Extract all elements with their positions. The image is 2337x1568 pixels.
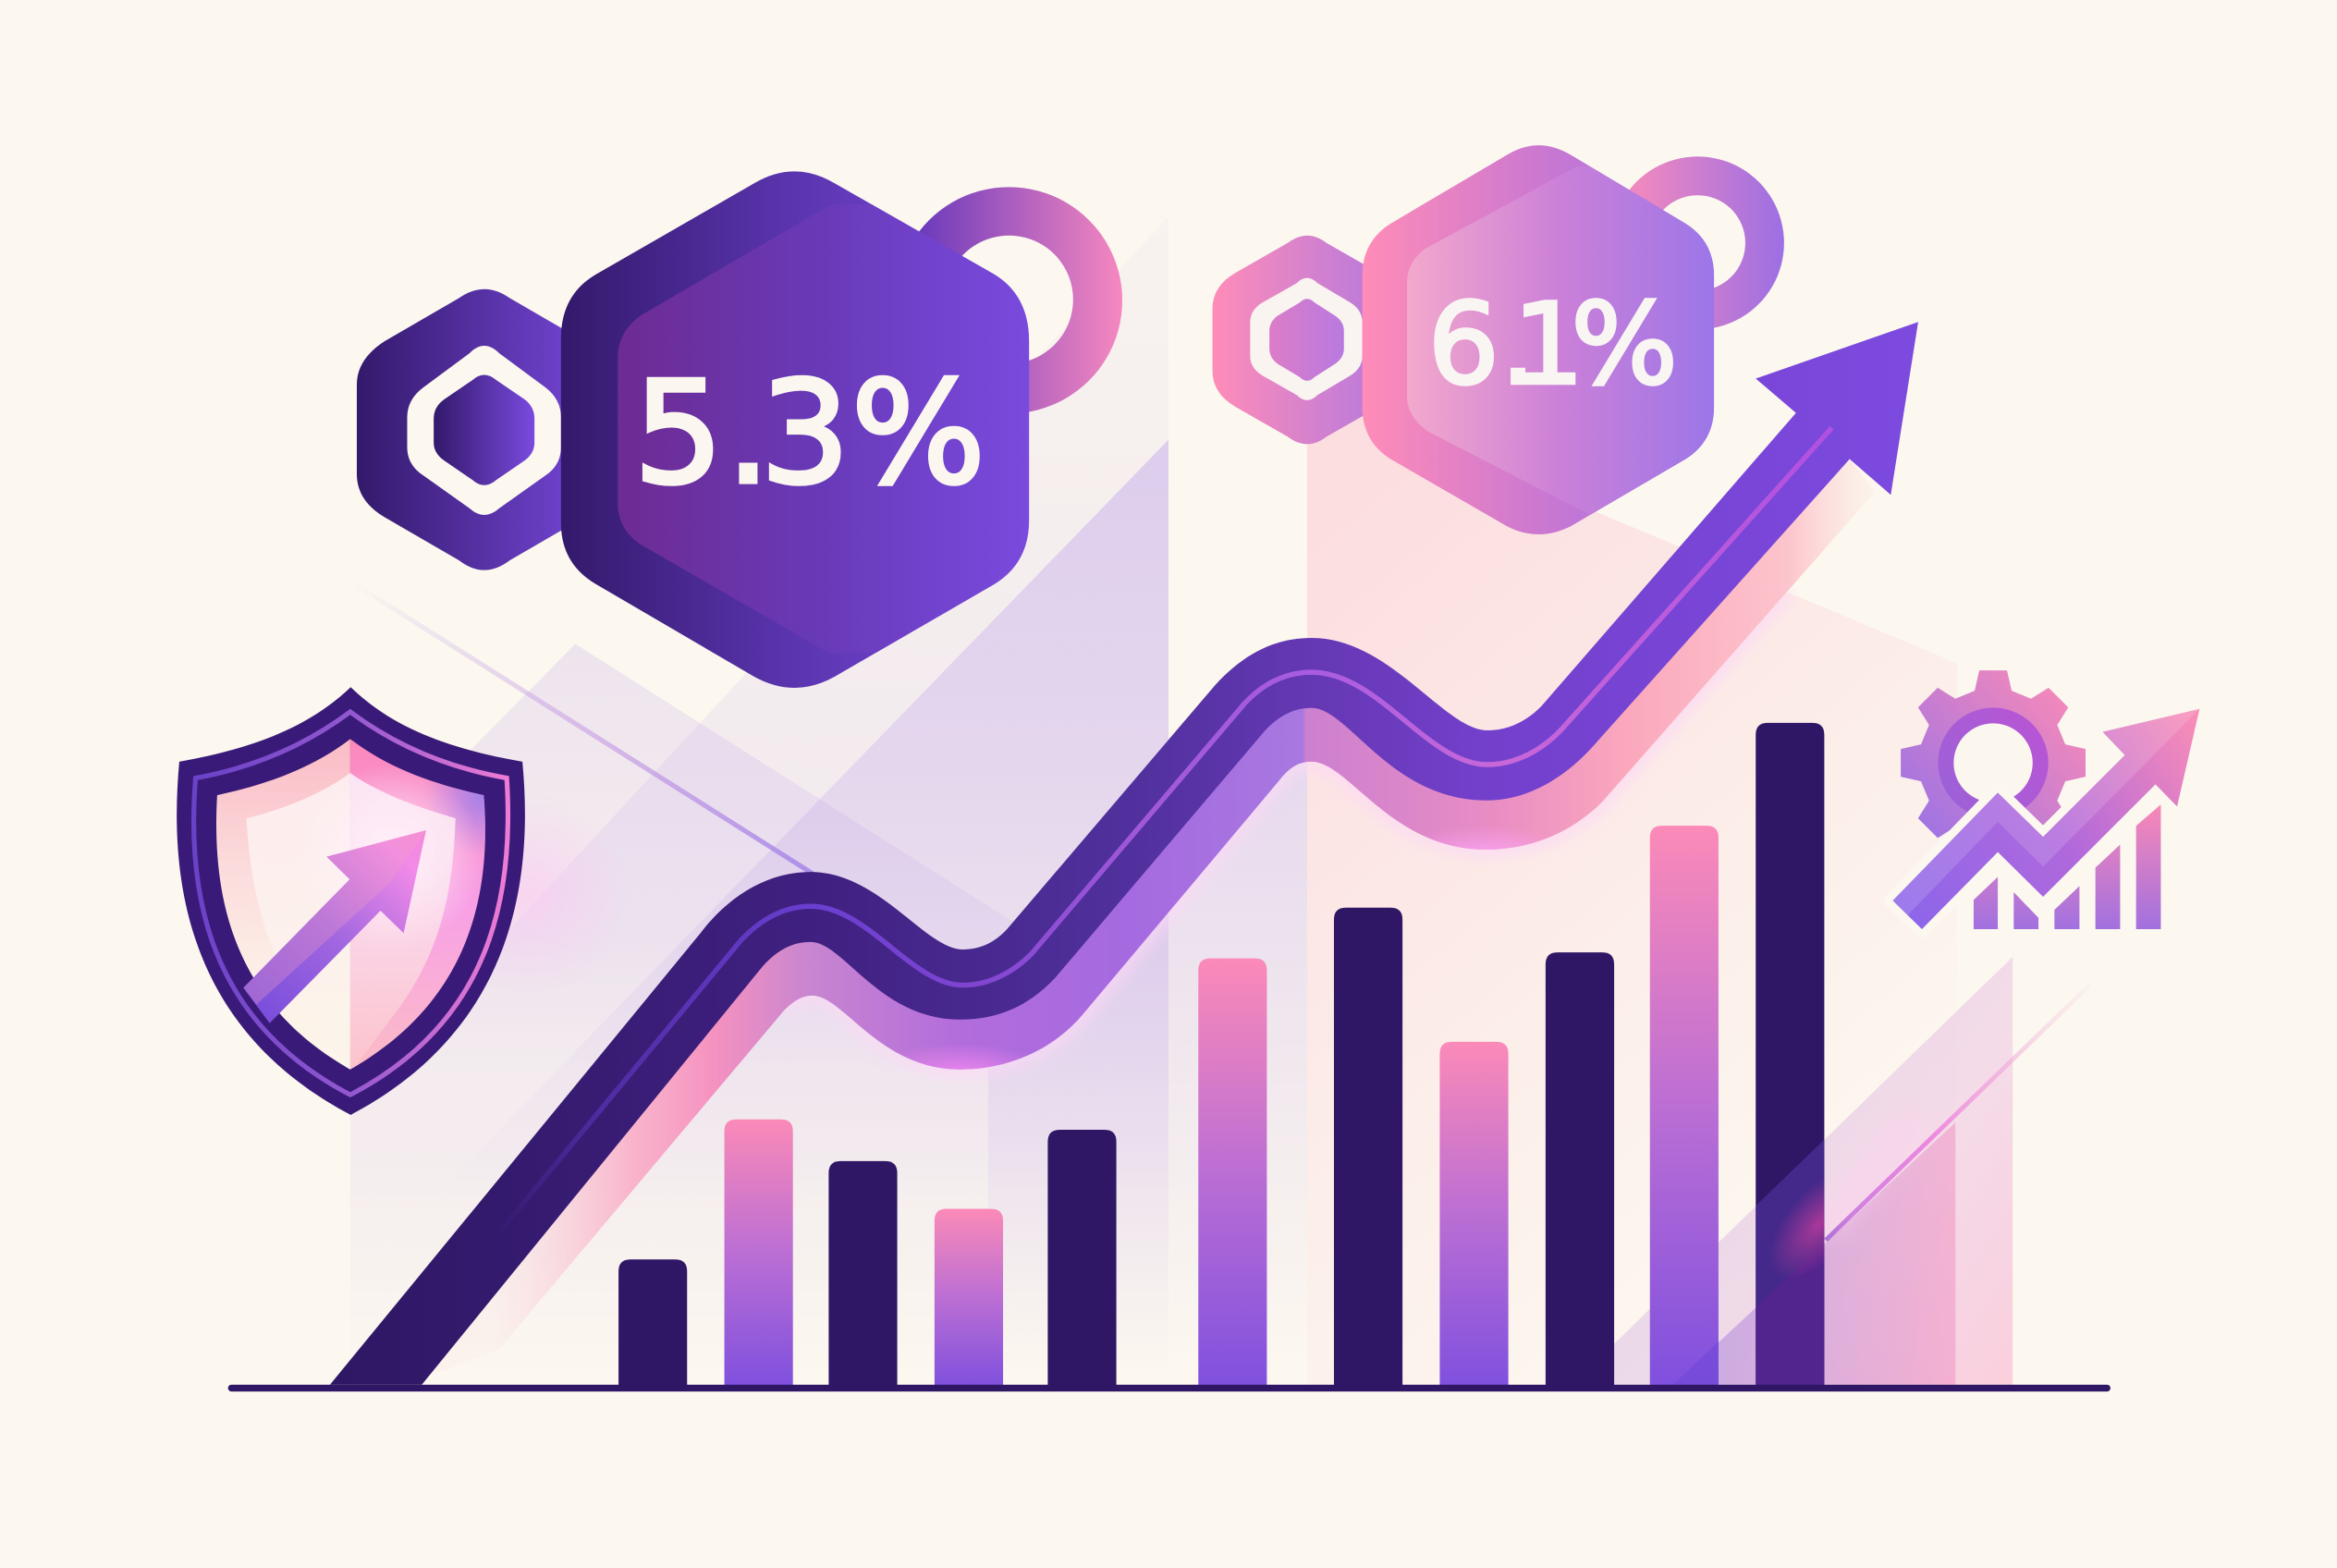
large hexagon [1363,145,1714,534]
lavender pane under ribbon [988,701,1307,1386]
background shapes [350,216,1957,1386]
small hexagon [357,289,611,570]
infographic canvas [177,145,2200,1392]
shield icon [177,687,548,1115]
ring [896,187,1122,413]
small hexagon white ring [1250,278,1363,400]
bar chart [618,723,1824,1388]
pale pane [1572,957,2013,1385]
lavender triangle pane [350,643,1028,1386]
tint on bar 10 [1673,1341,1719,1385]
bar 11 [1756,723,1824,1388]
shield outer [177,687,525,1115]
bar 1 [618,1259,687,1388]
rising ribbon arrow [330,322,1918,1385]
shield arrow upper facet [243,830,426,1005]
bar 5 [1047,1130,1117,1388]
bar 6 [1198,959,1266,1388]
lavender backdrop pane [350,216,1168,1386]
ribbon lower pink band [422,459,1875,1378]
small hexagon white ring [407,346,561,515]
growth line upper facet [1892,709,2199,915]
thin diagonal line [350,582,813,874]
large hexagon inner facet [618,204,1044,653]
chart baseline [228,1385,2111,1391]
pink pane [1307,390,1957,1386]
pink diagonal line [1826,986,2089,1240]
gear and growth icon [1892,670,2199,929]
ring [1611,156,1784,329]
bar 10 [1650,826,1719,1388]
pane glow [1826,1118,1915,1230]
ribbon glow [784,592,1787,1070]
shield glow [428,793,630,996]
small hexagon core [434,374,534,485]
shield stripe [194,712,508,1095]
darker pane [1673,1122,1955,1385]
small hexagon core [1269,299,1344,381]
lower right translucent panes [1572,957,2013,1385]
gear [1901,670,2086,855]
growth line halo [1892,709,2199,929]
tint on bar 11 [1756,1140,1825,1385]
shield arrow [243,830,426,1023]
ribbon centre stripe [496,428,1831,1235]
lavender darker pane [350,440,1168,1386]
shield face [216,739,485,1070]
large hexagon inner facet [1407,166,1729,514]
ribbon highlights [905,831,1542,1070]
value text: 6.1% [1428,278,1678,410]
metric: 6.1% [1213,145,1784,534]
large hexagon [561,171,1029,688]
small hexagon [1213,236,1401,444]
pane tint on tall bars [1673,986,2089,1388]
metric: 5.3% [357,171,1122,688]
bar 8 [1439,1042,1509,1388]
bar 9 [1546,952,1614,1388]
ribbon dark band with arrow head [330,322,1918,1385]
bar 7 [1334,908,1402,1388]
value text: 5.3% [633,352,985,517]
bar 3 [828,1161,898,1388]
bar 2 [725,1120,793,1388]
bar 4 [935,1208,1003,1388]
mini bars [1974,804,2160,929]
growth line arrow [1892,709,2199,929]
